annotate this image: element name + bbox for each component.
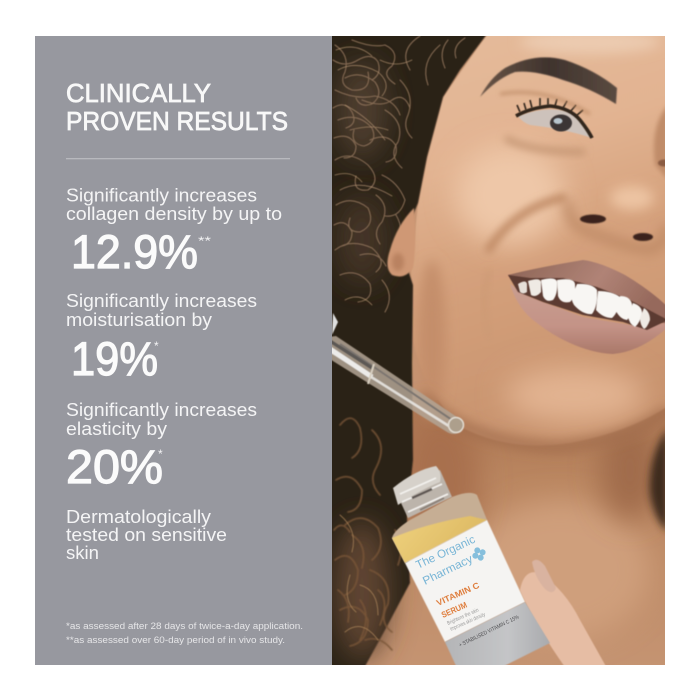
nose <box>568 186 665 250</box>
hair curls <box>333 36 465 312</box>
serum bottle: + STABILISED VITAMIN C 15% <box>458 614 520 649</box>
stat: moisturisation: moisturisation by <box>66 309 213 330</box>
stat: elasticity: elasticity by <box>66 418 168 439</box>
serum bottle <box>392 466 550 668</box>
serum liquid <box>392 516 487 563</box>
dropper <box>328 313 464 434</box>
photo: woman with serum <box>325 30 670 670</box>
stat: moisturisation: Significantly increases <box>66 290 257 311</box>
bottle neck <box>393 466 452 518</box>
serum bottle: Improves skin density <box>449 612 487 633</box>
silver base <box>445 602 550 668</box>
stat: moisturisation: 19% <box>71 332 158 385</box>
label text: Pharmacy <box>421 553 475 588</box>
serum bottle: VITAMIN C <box>435 580 481 608</box>
eyebrow <box>480 57 617 104</box>
stat: collagen density <box>66 184 282 278</box>
jaw shadow <box>422 395 668 447</box>
claim: dermatologically tested: skin <box>66 542 99 563</box>
stat: elasticity: 20% <box>66 440 163 493</box>
neck <box>406 404 665 624</box>
stat: moisturisation: * <box>154 339 159 353</box>
stat: collagen density: ** <box>198 234 211 248</box>
ear <box>387 208 415 276</box>
stat: collagen density: Significantly increases <box>66 184 257 206</box>
panel: clinical results <box>35 36 332 665</box>
claim: dermatologically tested: tested on sensitive <box>66 524 227 545</box>
cheek smile line <box>487 197 566 252</box>
claim: dermatologically tested <box>66 506 227 563</box>
bottle glass <box>392 493 487 563</box>
stat: elasticity: Significantly increases <box>66 399 257 420</box>
stat: elasticity: * <box>158 447 163 461</box>
heading <box>66 78 288 136</box>
footnotes <box>66 621 303 646</box>
stat: moisturisation <box>66 290 257 385</box>
eye <box>500 92 592 152</box>
heading: CLINICALLY <box>66 78 211 108</box>
second eye edge <box>652 107 665 178</box>
hair <box>325 30 490 670</box>
footnotes: *as assessed after 28 days of twice-a-day application. <box>66 621 303 632</box>
heading: PROVEN RESULTS <box>66 106 288 136</box>
stat: elasticity <box>66 399 257 493</box>
teeth <box>518 278 650 329</box>
label text: The Organic <box>414 534 477 572</box>
label text <box>414 537 476 585</box>
finger <box>520 560 608 670</box>
hair on lower right <box>650 428 668 532</box>
stat: collagen density: collagen density by up to <box>66 203 282 224</box>
logo cross <box>472 547 486 561</box>
serum bottle: Brightens the skin <box>446 608 480 627</box>
claim: dermatologically tested: Dermatologically <box>66 506 212 527</box>
face <box>411 30 670 447</box>
white label <box>405 520 525 642</box>
footnotes: **as assessed over 60-day period of in vivo study. <box>66 635 285 646</box>
stat: collagen density: 12.9% <box>71 225 198 278</box>
serum bottle: SERUM <box>440 600 468 620</box>
lips and teeth <box>508 260 668 354</box>
